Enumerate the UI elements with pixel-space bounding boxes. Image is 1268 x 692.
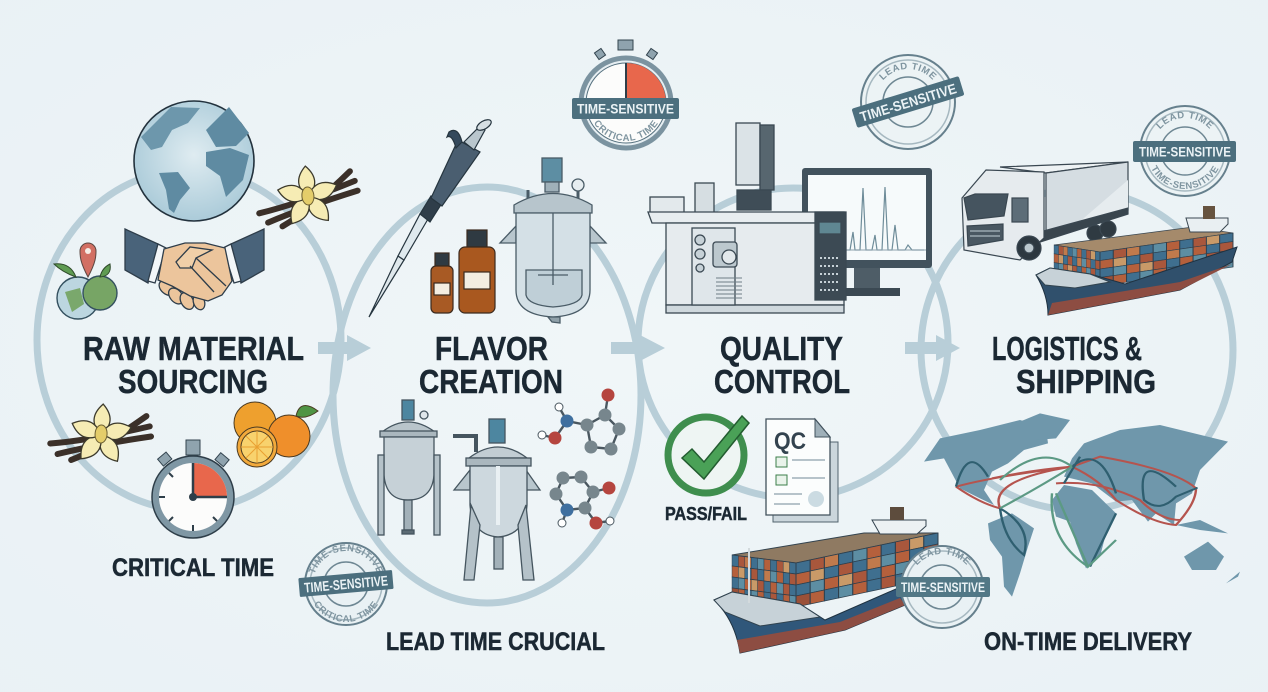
- heading: quality control: [714, 330, 850, 400]
- icon: pipette: [369, 118, 493, 317]
- heading: flavor creation: CREATION: [419, 363, 563, 400]
- heading: logistics and shipping: LOGISTICS &: [992, 330, 1142, 367]
- stopwatch stamp: critical time: TIME-SENSITIVE: [577, 100, 674, 116]
- stamp: time-sensitive upper: [852, 54, 964, 150]
- heading: raw material sourcing: SOURCING: [118, 363, 268, 400]
- stamp: time-sensitive right: TIME-SENSITIVE: [1139, 144, 1231, 160]
- heading: raw material sourcing: [83, 330, 304, 400]
- stamp: time-sensitive ship: [896, 545, 990, 629]
- stamp: time-sensitive upper: LEAD TIME: [878, 62, 937, 80]
- stamp: time-sensitive ship: TIME-SENSITIVE: [901, 579, 985, 595]
- icon: monitor with chromatogram: [802, 168, 932, 296]
- icon: globe: [134, 101, 254, 221]
- icon: small globes with pin: [54, 243, 117, 319]
- icon: handshake: [125, 229, 264, 312]
- icon: world map with routes: [924, 413, 1240, 597]
- icon: molecule bottom: [550, 470, 616, 530]
- heading: logistics and shipping: [992, 330, 1156, 400]
- icon: vanilla flower top: [255, 162, 360, 231]
- icon: brown bottles: [431, 230, 495, 313]
- heading: quality control: QUALITY: [720, 330, 843, 367]
- heading: quality control: CONTROL: [714, 363, 850, 400]
- stamp: time-sensitive right: TIME-SENSITIVE: [1152, 164, 1219, 189]
- stamp: time-sensitive lower left: TIME-SENSITIVE: [308, 544, 384, 572]
- stage 1: raw material sourcing: [49, 101, 360, 582]
- icon: gas chromatograph instrument: [648, 123, 846, 313]
- arrows between stages: [318, 335, 960, 361]
- caption: lead time crucial: LEAD TIME CRUCIAL: [386, 628, 605, 656]
- stamp: time-sensitive right: [1133, 105, 1236, 197]
- process loop circles: [37, 170, 1233, 603]
- caption: on-time delivery: ON-TIME DELIVERY: [984, 628, 1192, 656]
- icon: steel tank right: [453, 419, 540, 580]
- stamp: time-sensitive lower left: [298, 542, 394, 626]
- icon: glass reactor: [500, 158, 606, 323]
- icon: pass check mark: [668, 416, 749, 493]
- stamp: time-sensitive ship: LEAD TIME: [912, 548, 971, 565]
- caption: pass/fail: PASS/FAIL: [665, 504, 747, 524]
- stage 3: quality control: [648, 123, 932, 524]
- icon: steel tank left: [378, 400, 440, 535]
- icon: oranges: [234, 402, 318, 467]
- icon: molecule top: [538, 388, 626, 456]
- stopwatch stamp: critical time: CRITICAL TIME: [594, 120, 658, 141]
- icon: QC document: [766, 419, 838, 522]
- icon: container ship upper: [1036, 206, 1237, 315]
- heading: logistics and shipping: SHIPPING: [1016, 363, 1156, 400]
- stamp: time-sensitive upper: TIME-SENSITIVE: [858, 80, 958, 125]
- icon: stopwatch: [152, 440, 234, 538]
- stopwatch stamp: critical time: [572, 40, 679, 150]
- icon: container ship lower: [714, 507, 938, 653]
- icon: vanilla flower bottom: [49, 401, 153, 468]
- stamp: time-sensitive lower left: CRITICAL TIME: [314, 601, 378, 622]
- caption: critical time: CRITICAL TIME: [112, 554, 274, 582]
- stage 4: logistics and shipping: [713, 105, 1240, 656]
- stamp: time-sensitive lower left: TIME-SENSITIVE: [303, 572, 389, 596]
- heading: flavor creation: FLAVOR: [435, 330, 548, 367]
- icon: truck: [962, 162, 1128, 260]
- stamp: time-sensitive right: LEAD TIME: [1156, 112, 1214, 129]
- heading: raw material sourcing: RAW MATERIAL: [83, 330, 304, 367]
- icon: QC document: QC: [774, 428, 806, 455]
- stage 2: flavor creation: [298, 119, 626, 656]
- heading: flavor creation: [419, 330, 563, 400]
